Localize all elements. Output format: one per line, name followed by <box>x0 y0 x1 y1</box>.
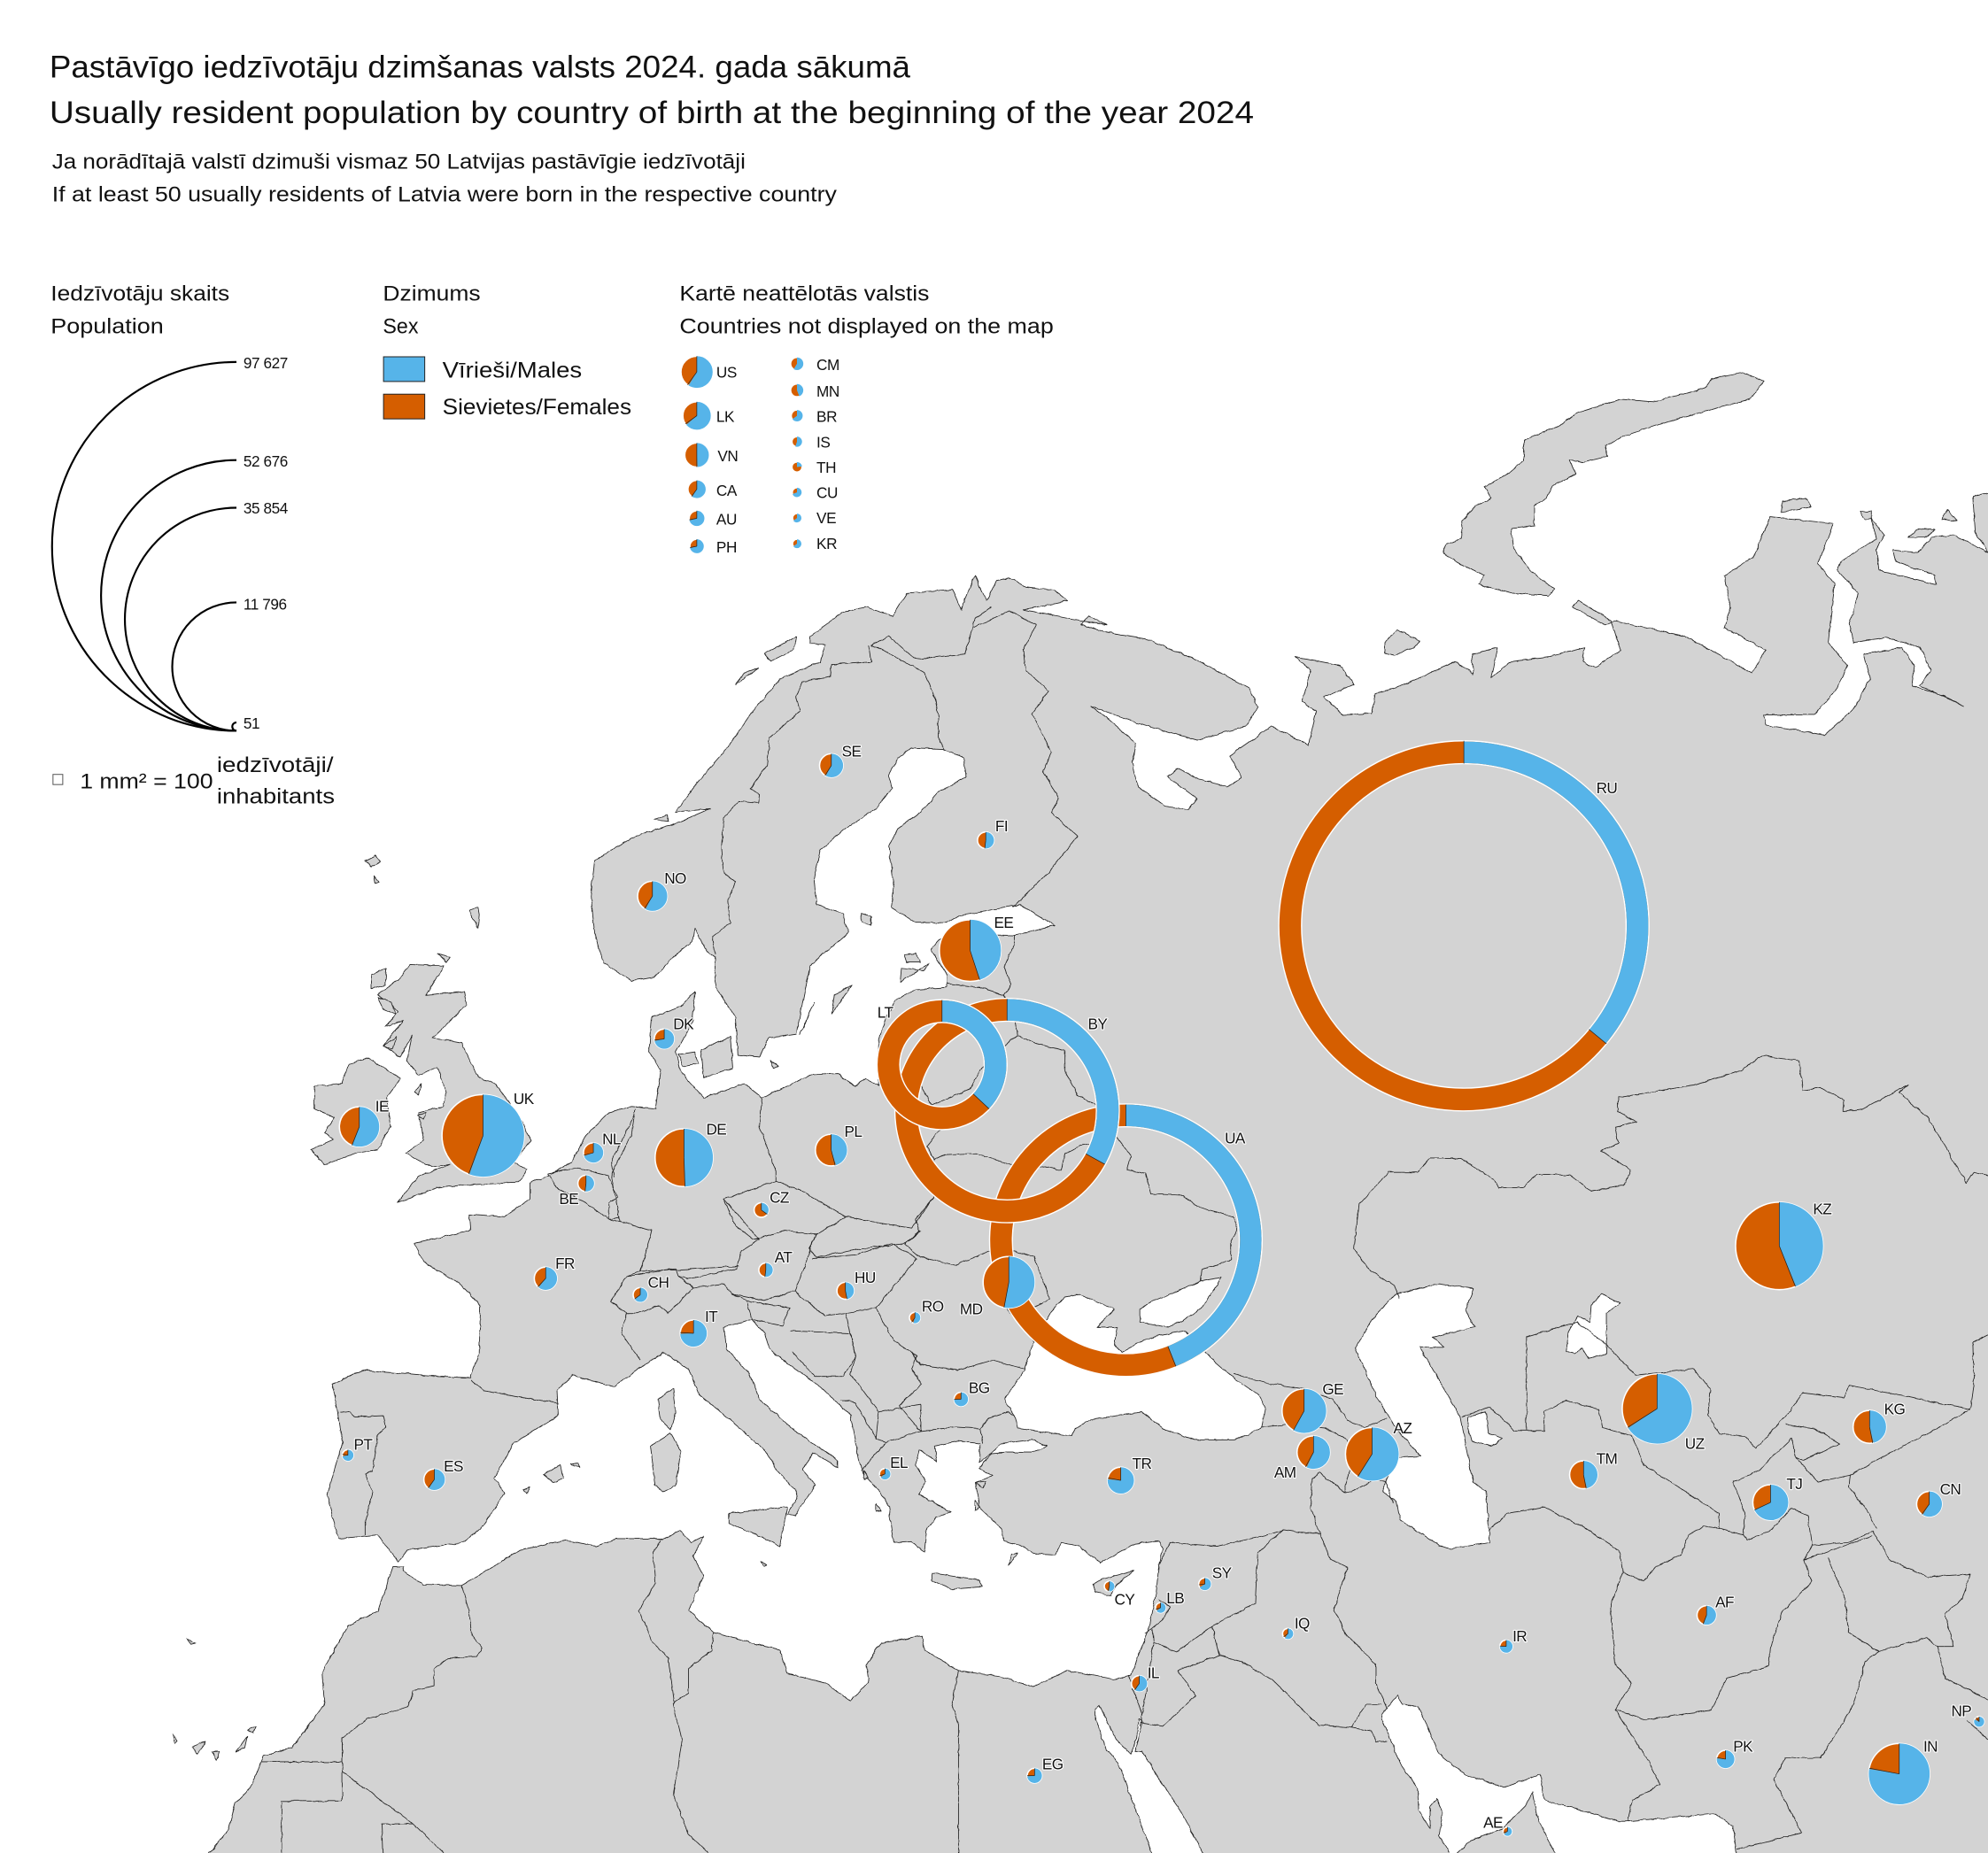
map: Saaremaa <box>901 963 929 982</box>
arc values <box>244 354 289 732</box>
pie: CU <box>793 488 801 497</box>
legend heading: sex: Sex <box>383 315 418 339</box>
country code labels: RU <box>1597 779 1617 797</box>
pie: MD <box>983 1256 1034 1308</box>
country code labels: NO <box>664 869 686 887</box>
scale note: 1 mm² = 100 <box>80 769 213 793</box>
country code labels: SE <box>842 743 862 761</box>
map: Aral Sea <box>1566 1294 1621 1359</box>
map: Shetland <box>470 907 479 928</box>
arc values: 51 <box>244 714 259 732</box>
legend country codes: PH <box>716 538 737 556</box>
pie: AM <box>1297 1436 1330 1469</box>
ring chart: RU <box>1290 741 1637 1100</box>
pie: EG <box>1027 1768 1042 1783</box>
scale note: iedzīvotāji/ <box>217 753 334 777</box>
pie: NP <box>1974 1717 1984 1726</box>
map: Malta <box>761 1562 767 1566</box>
country code labels: LT <box>878 1004 893 1022</box>
pie: AZ <box>1345 1427 1399 1481</box>
pie: ES <box>424 1469 445 1490</box>
title: Usually resident population by country of birth at the beginning of the year 2024 <box>50 96 1254 130</box>
legend heading: population: Population <box>50 315 164 339</box>
country code labels: UZ <box>1685 1434 1705 1452</box>
pie: IS <box>792 436 802 447</box>
pie: VN <box>685 443 708 467</box>
legend country codes: MN <box>816 382 839 400</box>
country code labels: NL <box>602 1131 621 1148</box>
legend item: males <box>383 357 582 383</box>
pie: CY <box>1104 1581 1115 1592</box>
pie: EL <box>879 1469 891 1479</box>
country code labels <box>353 743 1971 1831</box>
map: Sea of Marmara <box>990 1440 1048 1454</box>
pie: NL <box>584 1143 603 1162</box>
country code labels: EL <box>890 1454 908 1471</box>
map: Isle of Man <box>414 1084 421 1095</box>
legend country codes: LK <box>716 408 735 426</box>
country code labels: AT <box>775 1248 793 1266</box>
pie: LB <box>1156 1602 1165 1613</box>
pie: CH <box>633 1288 647 1302</box>
country code labels: AZ <box>1394 1419 1412 1437</box>
country code labels: AM <box>1274 1463 1296 1481</box>
ring chart: BY <box>906 999 1108 1211</box>
map: Islay <box>383 1037 397 1049</box>
country code labels: KG <box>1884 1401 1905 1418</box>
pie: KG <box>1853 1410 1886 1443</box>
pie: PT <box>343 1449 353 1461</box>
country code labels: GE <box>1322 1380 1343 1398</box>
map: Sardinia <box>650 1433 681 1492</box>
legend country codes: IS <box>816 433 830 451</box>
pie: IL <box>1132 1676 1147 1691</box>
pie: CA <box>688 481 706 498</box>
country code labels: CN <box>1940 1480 1961 1498</box>
country code labels: KZ <box>1813 1200 1831 1217</box>
legend country codes: TH <box>816 459 836 476</box>
legend: countries not on the map <box>679 282 1054 556</box>
map: Madeira <box>186 1639 195 1644</box>
map: Crete <box>932 1573 981 1589</box>
pie: KR <box>793 539 801 548</box>
legend heading: population: Iedzīvotāju skaits <box>50 282 229 305</box>
legend country codes: KR <box>816 535 837 552</box>
pie: AU <box>689 511 704 526</box>
map: Bely island <box>1782 498 1812 512</box>
pie: PK <box>1717 1750 1735 1768</box>
map: Red Sea <box>1095 1705 1206 1853</box>
country code labels: IR <box>1512 1627 1527 1645</box>
country code labels: IQ <box>1295 1615 1310 1633</box>
pie: BG <box>954 1393 968 1406</box>
map: mainland Eurasia and Africa <box>203 491 1988 1853</box>
legend country codes: CM <box>816 356 839 374</box>
country code labels: PL <box>845 1123 862 1140</box>
map: Arctic islet <box>1941 510 1958 521</box>
title: Pastāvīgo iedzīvotāju dzimšanas valsts 2024. gada sākumā <box>50 50 911 84</box>
pie: BE <box>578 1176 594 1192</box>
pie: IN <box>1868 1743 1930 1804</box>
country code labels: IT <box>705 1308 718 1325</box>
map: Aland <box>861 914 871 925</box>
pie: RO <box>909 1312 920 1324</box>
pie: UZ <box>1622 1374 1692 1444</box>
country code labels: ES <box>444 1457 463 1475</box>
subtitle: If at least 50 usually residents of Latvia were born in the respective country <box>52 183 838 207</box>
pie: TJ <box>1752 1485 1788 1520</box>
legend country codes: VN <box>717 447 738 465</box>
map: Lofoten <box>735 668 760 684</box>
pie: IQ <box>1282 1628 1293 1639</box>
map: Zealand <box>701 1037 733 1077</box>
arc values: 97 627 <box>244 354 288 372</box>
pie: IR <box>1500 1640 1512 1653</box>
pie: CZ <box>754 1203 769 1217</box>
map: Gotland <box>832 984 852 1014</box>
pie: FI <box>978 832 994 848</box>
arc values: 35 854 <box>244 499 289 517</box>
country code labels: MD <box>960 1301 983 1318</box>
map: Faroe islet <box>374 876 379 884</box>
country code labels: BG <box>969 1378 990 1396</box>
map: Persian Gulf and Arabian Sea <box>1382 1695 1737 1853</box>
map: Arctic islets <box>1860 511 1871 520</box>
country code labels: EG <box>1042 1756 1064 1773</box>
country code labels: BY <box>1087 1015 1108 1032</box>
map: Rhodes <box>1008 1554 1018 1565</box>
map: Canary Tenerife <box>193 1741 205 1754</box>
map: Ibiza <box>523 1486 530 1493</box>
subtitle <box>52 150 838 207</box>
map: Fuerteventura <box>236 1736 247 1751</box>
map: Anglesey <box>417 1113 426 1119</box>
country code labels: UK <box>514 1090 535 1108</box>
pie: AF <box>1697 1606 1716 1625</box>
pie: DK <box>654 1029 674 1049</box>
map: Bornholm <box>771 1061 778 1069</box>
map: Black Sea <box>1004 1294 1265 1440</box>
country code labels: IE <box>375 1098 389 1116</box>
country code labels: TM <box>1597 1449 1617 1467</box>
pie: CN <box>1916 1492 1942 1517</box>
map: Great Britain <box>378 964 531 1203</box>
map: Lesbos <box>975 1482 986 1488</box>
map: Norway islet <box>654 815 669 822</box>
legend item: females: Sievietes/Females <box>443 395 631 420</box>
pie: TH <box>792 462 802 472</box>
pie: NO <box>638 881 668 911</box>
pie: LK <box>683 402 711 429</box>
pie: PH <box>690 539 704 553</box>
legend country codes <box>716 356 839 556</box>
country code labels: CZ <box>770 1189 789 1207</box>
legend country codes: CU <box>816 484 838 502</box>
legend country codes: AU <box>716 511 737 529</box>
country code labels: LB <box>1166 1589 1184 1607</box>
map: Lanzarote <box>247 1726 256 1733</box>
country code labels: CH <box>648 1274 669 1292</box>
pie: CM <box>791 358 803 370</box>
country code labels: EE <box>994 914 1013 931</box>
map: Kolguev <box>1384 630 1420 655</box>
country code labels: CY <box>1115 1590 1135 1608</box>
country code labels: AF <box>1715 1593 1734 1610</box>
pie: UK <box>442 1094 524 1177</box>
pie: IE <box>339 1107 379 1147</box>
legend heading: population <box>50 282 229 339</box>
map: Cyprus <box>1093 1571 1133 1595</box>
map: Corsica <box>658 1388 676 1430</box>
country code labels: NP <box>1951 1702 1971 1719</box>
map: Sicily <box>729 1507 787 1547</box>
title <box>50 50 1254 130</box>
country code labels: DK <box>673 1015 694 1032</box>
pie: AT <box>759 1263 773 1277</box>
arc values: 52 676 <box>244 452 288 470</box>
map: Sea of Azov <box>1140 1278 1221 1327</box>
ring chart: LT <box>888 1000 995 1118</box>
pie: SY <box>1199 1578 1211 1590</box>
country code labels: PT <box>353 1436 373 1454</box>
pie: US <box>681 356 713 388</box>
country code labels: PK <box>1733 1737 1753 1755</box>
pie: AE <box>1503 1827 1512 1836</box>
legend heading: countries <box>679 282 1054 339</box>
country code labels: IN <box>1923 1737 1938 1755</box>
map: Ireland <box>311 1058 400 1165</box>
map: Corfu <box>863 1471 869 1479</box>
pie: IT <box>680 1320 707 1347</box>
map: Caspian Sea <box>1356 1284 1489 1548</box>
ring chart: UA <box>1001 1105 1250 1366</box>
map: Arctic islet east <box>1908 529 1935 537</box>
map: Novaya Zemlya <box>1443 373 1764 596</box>
country code labels: AE <box>1483 1813 1503 1831</box>
pie: VE <box>793 513 801 522</box>
legend item: males: Vīrieši/Males <box>443 359 582 383</box>
pie: MN <box>791 384 803 397</box>
pie: HU <box>837 1282 854 1300</box>
proportional arcs <box>52 362 236 730</box>
map: Kara-Bogaz <box>1468 1412 1503 1446</box>
legend country codes: BR <box>816 408 837 426</box>
country code labels: UA <box>1225 1129 1246 1147</box>
map: La Palma <box>173 1733 177 1744</box>
legend: population <box>50 282 335 809</box>
map: Canary Gran Canaria <box>212 1751 220 1760</box>
legend country codes: VE <box>816 509 836 527</box>
subtitle: Ja norādītajā valstī dzimuši vismaz 50 Latvijas pastāvīgie iedzīvotāji <box>52 150 746 174</box>
pie: PL <box>816 1134 847 1166</box>
country code labels: FR <box>555 1255 575 1272</box>
pie: KZ <box>1736 1202 1823 1290</box>
map: Menorca <box>570 1463 579 1468</box>
pie: SE <box>819 753 843 777</box>
country code labels: TR <box>1133 1455 1151 1472</box>
map: Orkney <box>438 954 450 962</box>
map: Hiiumaa <box>904 954 920 962</box>
map: country borders <box>261 607 1988 1853</box>
map: Chios <box>975 1501 980 1509</box>
country code labels: DE <box>706 1120 726 1138</box>
country code labels: IL <box>1148 1664 1159 1681</box>
scale note: inhabitants <box>217 785 335 809</box>
pie: EE <box>940 920 1001 981</box>
country code labels: HU <box>855 1269 876 1286</box>
map: Skye <box>378 998 396 1014</box>
map: Oland <box>800 1002 814 1034</box>
pie: BR <box>792 410 802 421</box>
map: Mallorca <box>544 1465 563 1483</box>
map: Faroe islands <box>365 855 381 867</box>
map: Hebrides <box>372 969 387 989</box>
pie: GE <box>1282 1389 1327 1433</box>
country code labels: TJ <box>1786 1475 1802 1493</box>
country code labels: RO <box>922 1298 944 1316</box>
pie: TM <box>1570 1461 1597 1489</box>
country code labels: BE <box>559 1190 578 1208</box>
legend heading: sex <box>383 282 481 339</box>
country code labels: SY <box>1212 1563 1233 1581</box>
legend heading: countries: Countries not displayed on the map <box>679 315 1054 339</box>
map: Vesteralen <box>764 637 796 661</box>
legend heading: countries: Kartē neattēlotās valstis <box>679 282 929 305</box>
map: Kefalonia <box>876 1503 881 1512</box>
map: Funen <box>678 1052 699 1066</box>
legend country codes: US <box>716 364 737 382</box>
scale note <box>53 753 335 809</box>
legend country codes: CA <box>716 482 738 499</box>
pie: FR <box>534 1267 557 1290</box>
pie: TR <box>1108 1467 1134 1494</box>
arc values: 11 796 <box>244 596 287 614</box>
legend heading: sex: Dzimums <box>383 282 481 305</box>
legend: sex <box>383 282 631 420</box>
country code labels: FI <box>995 817 1008 835</box>
pie: DE <box>655 1129 713 1186</box>
